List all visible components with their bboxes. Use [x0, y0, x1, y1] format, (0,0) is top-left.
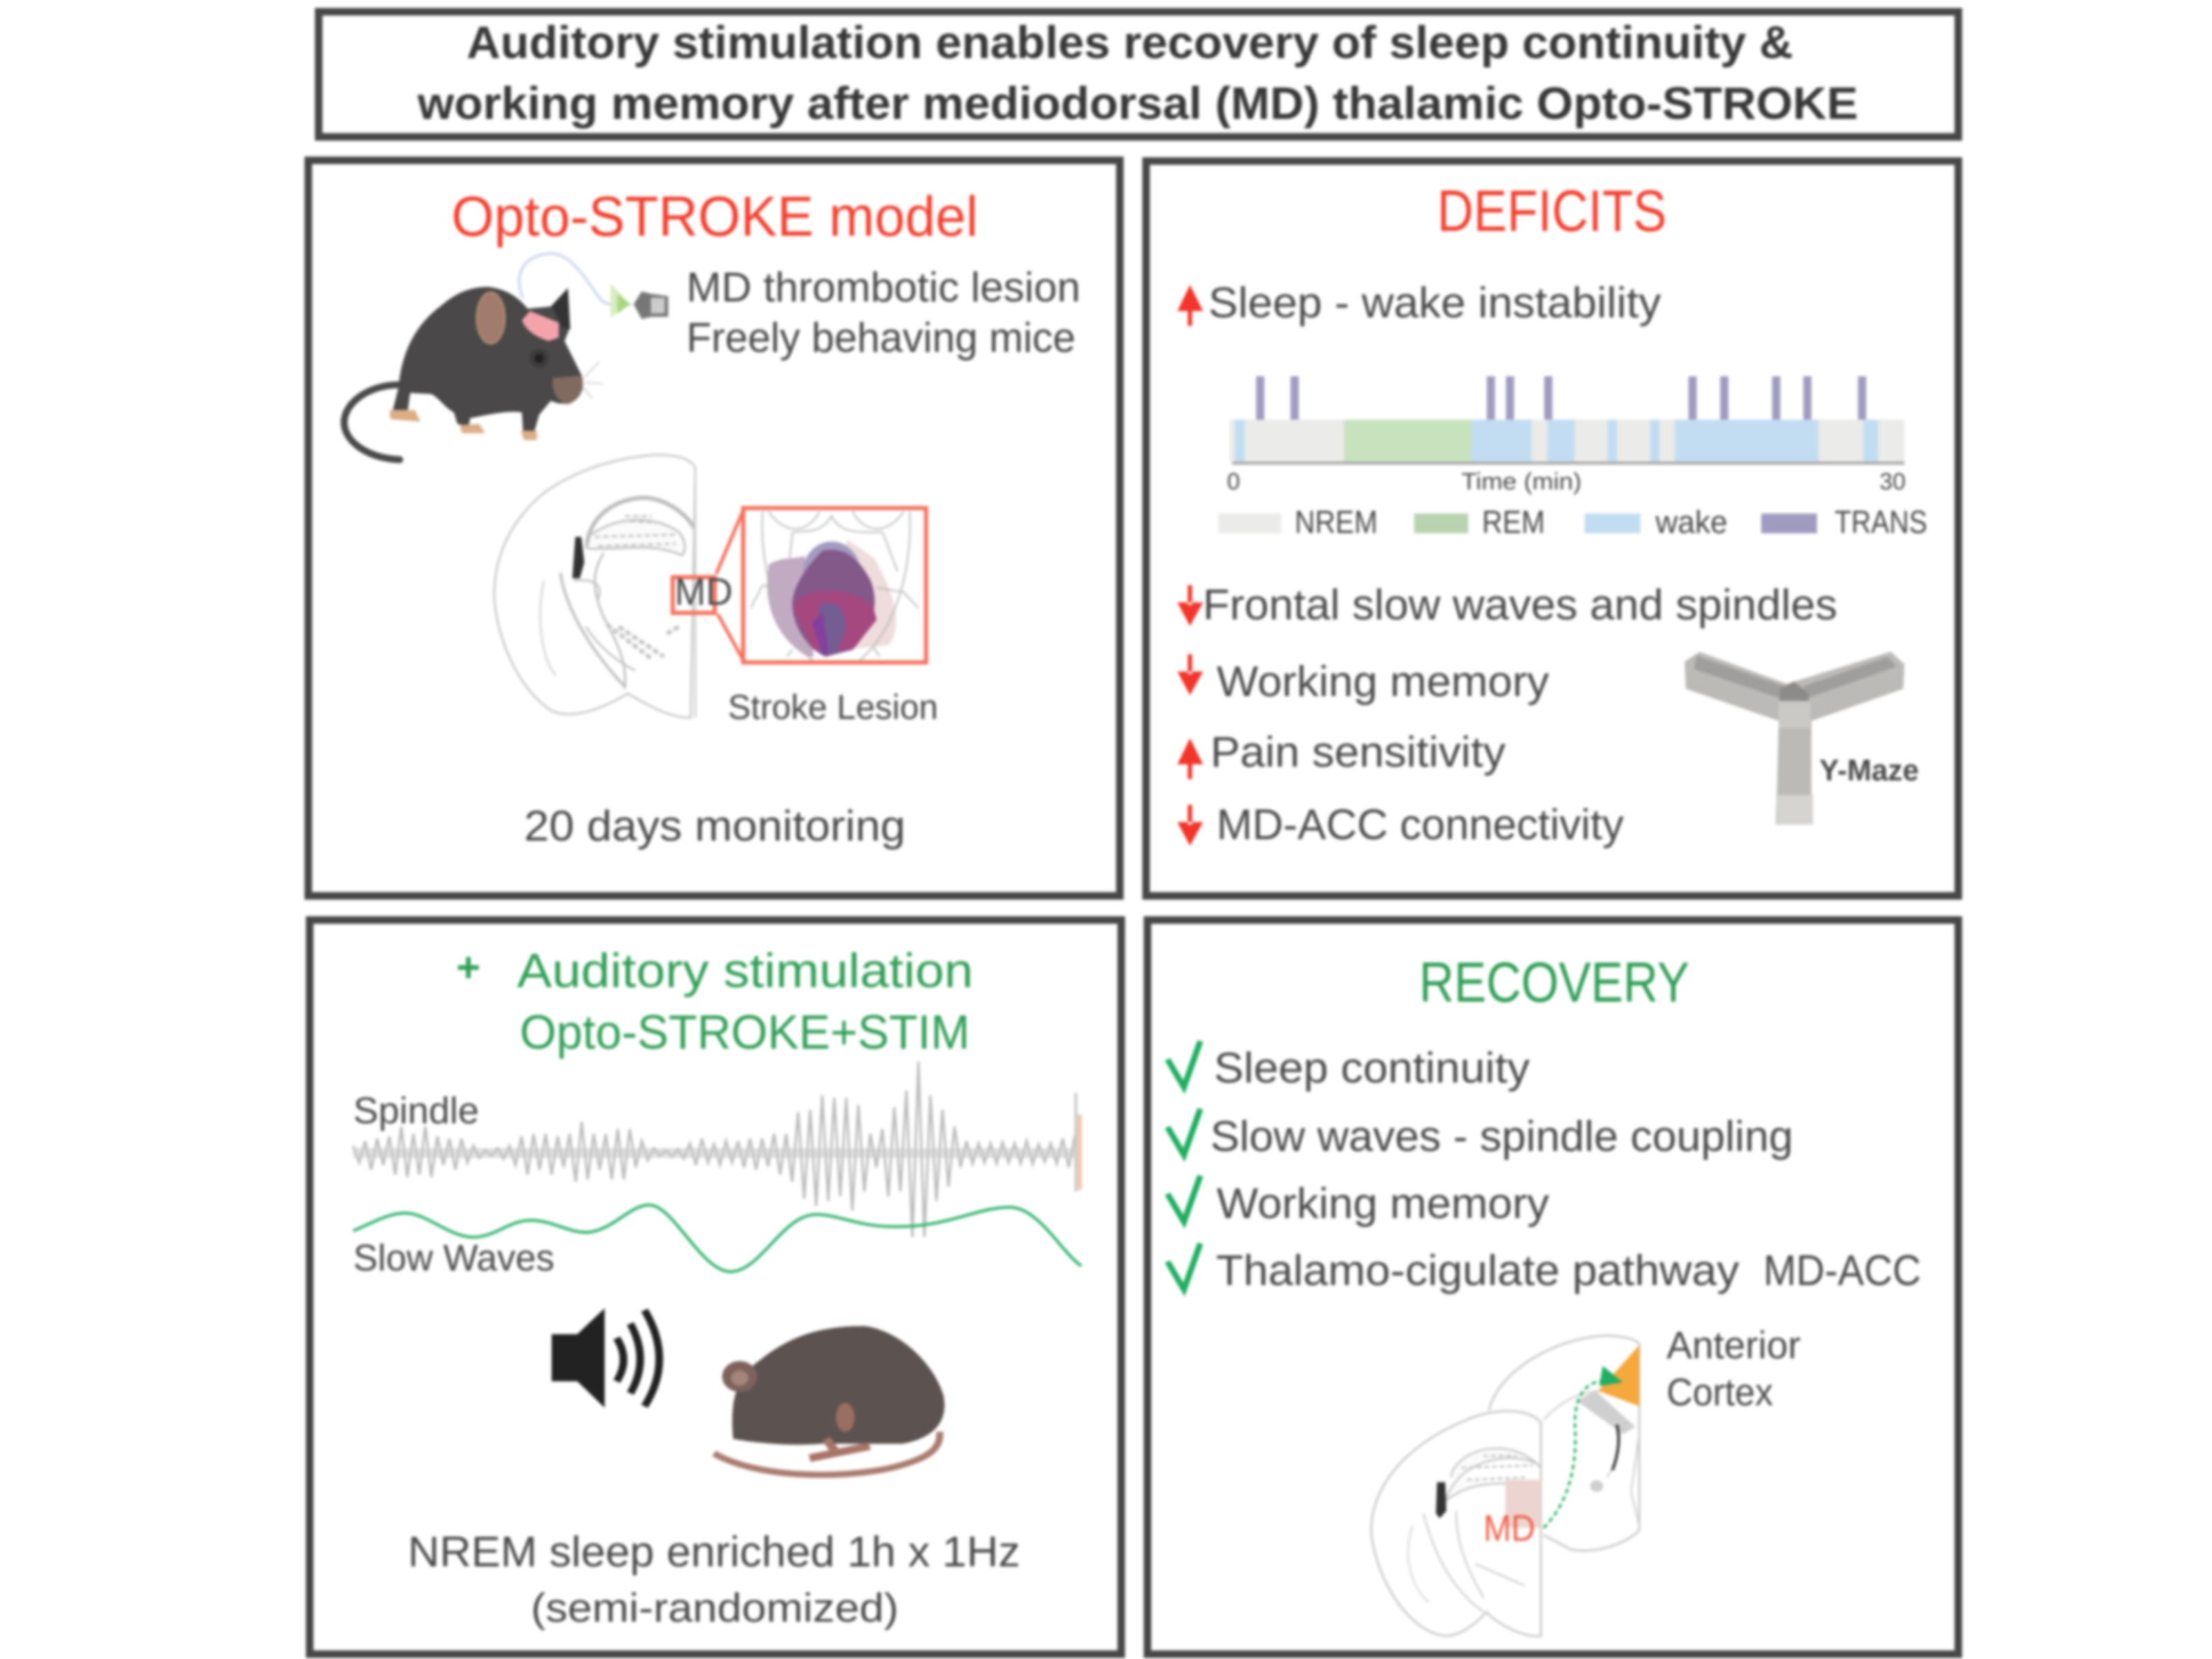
icon: plus sign: + [456, 944, 480, 991]
chart: hypnogram: wake [1655, 504, 1727, 540]
label: MD: MD [675, 570, 733, 613]
panel: RECOVERY [1147, 920, 1958, 1654]
label: Anterior: Anterior [1667, 1323, 1801, 1367]
illustration: brain sections with MD-ACC pathway [1371, 1335, 1639, 1636]
text: Frontal slow waves and spindles: Frontal slow waves and spindles [1203, 581, 1837, 629]
icon: sleeping mouse [714, 1326, 944, 1475]
text: MD-ACC connectivity: MD-ACC connectivity [1217, 801, 1624, 849]
text: NREM sleep enriched: NREM sleep enriched 1h x 1Hz [408, 1528, 1020, 1576]
icons: green check marks [1168, 1041, 1200, 1289]
heading: RECOVERY: RECOVERY [1419, 951, 1689, 1014]
label: Y-Maze: Y-Maze [1819, 753, 1919, 787]
text: Sleep - wake instability: Sleep - wake instability [1208, 279, 1661, 327]
icon: Y-maze [1685, 652, 1904, 825]
chart: hypnogram: TRANS [1835, 504, 1927, 540]
arrow down [1177, 805, 1203, 846]
chart: slow wave trace [353, 1205, 1081, 1272]
heading: DEFICITS: DEFICITS [1437, 178, 1667, 243]
icon: speaker [552, 1309, 659, 1407]
text: 20 days monitoring: 20 days monitoring [524, 803, 906, 850]
text: Slow waves - spindle coupling: Slow waves - spindle coupling [1210, 1113, 1793, 1161]
arrows: up and down markers [1177, 285, 1203, 846]
arrow down [1177, 654, 1203, 695]
panel: DEFICITS [1146, 161, 1958, 896]
text: MD-ACC: MD-ACC [1763, 1247, 1921, 1295]
text: Sleep continuity: Sleep continuity [1214, 1044, 1530, 1092]
text: semi-randomized: (semi-randomized) [531, 1586, 899, 1631]
chart: hypnogram: 30 [1880, 469, 1906, 495]
arrow down [1177, 585, 1203, 626]
title line 1: Auditory stimulation enables recovery of sleep continuity & [467, 17, 1793, 68]
label: Stroke Lesion: Stroke Lesion [728, 688, 938, 727]
chart: hypnogram: REM [1482, 504, 1545, 540]
heading: Opto-STROKE model: Opto-STROKE model [451, 185, 978, 248]
panel: Auditory stimulation [310, 920, 1121, 1654]
text: Working memory: Working memory [1217, 1180, 1549, 1228]
text: Thalamo-cigulate pathway: Thalamo-cigulate pathway [1216, 1247, 1739, 1295]
label: Spindle: Spindle [353, 1090, 479, 1132]
chart: hypnogram [1219, 376, 1927, 540]
panel: Opto-STROKE model [308, 160, 1120, 896]
chart: hypnogram: Time (min) [1461, 469, 1582, 495]
chart: hypnogram: 0 [1227, 469, 1240, 495]
text: Pain sensitivity: Pain sensitivity [1210, 729, 1506, 776]
illustration: coronal brain section with MD zoom [494, 455, 926, 718]
title banner [319, 12, 1958, 137]
label: MD: MD [1483, 1508, 1535, 1549]
text: Working memory: Working memory [1217, 658, 1549, 706]
arrow up [1177, 285, 1203, 326]
text: MD thrombotic lesion: MD thrombotic lesion [686, 264, 1080, 310]
label: Slow Waves: Slow Waves [353, 1237, 554, 1279]
label: Cortex: Cortex [1667, 1370, 1773, 1414]
heading: Opto-STROKE+STIM: Opto-STROKE+STIM [520, 1005, 970, 1059]
title line 2: working memory after mediodorsal (MD) thalamic Opto-STROKE [417, 77, 1858, 129]
chart: spindle trace [353, 1062, 1080, 1237]
arrow up [1177, 738, 1203, 779]
icon: mouse with optic fiber [344, 254, 668, 460]
chart: hypnogram: NREM [1295, 504, 1378, 540]
heading: Auditory stimulation: Auditory stimulation [517, 944, 973, 997]
text: Freely behaving mice: Freely behaving mice [686, 315, 1076, 361]
